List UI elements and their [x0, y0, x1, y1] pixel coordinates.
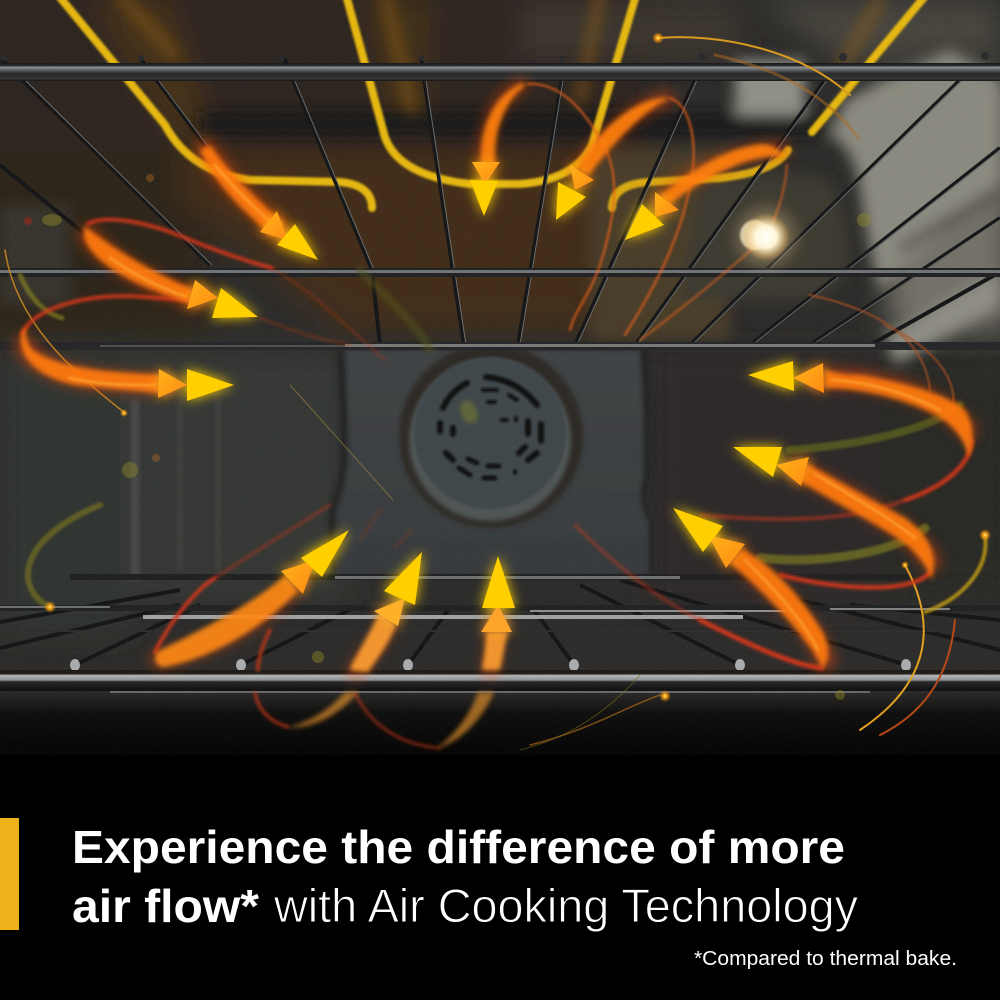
swirl: bottom flows: [155, 505, 508, 748]
wall pressed channels: [135, 350, 652, 580]
swirl: right flows: [575, 370, 973, 668]
upper oven rack: [0, 52, 1000, 350]
yellow accent bar: [0, 818, 19, 930]
headline: [72, 821, 858, 932]
arrows: right: [673, 361, 824, 568]
front lower bar: [0, 670, 1000, 691]
convection fan cover: [399, 344, 583, 528]
arrows: upper left: [158, 211, 318, 401]
headline: with Air Cooking Technology: [273, 879, 858, 932]
footnote: *Compared to thermal bake.: [694, 948, 957, 970]
spark points: [44, 32, 991, 702]
swirl: upper centre flows: [481, 83, 787, 340]
caption band: [0, 755, 1000, 1000]
bokeh specks: [24, 174, 871, 700]
back wall panel: [335, 350, 655, 575]
front rack bar: [0, 63, 1000, 81]
oven interior photo background: [0, 0, 1000, 760]
fade to black at base of photo: [0, 690, 1000, 756]
heating element: [58, 0, 926, 208]
light flare: [736, 207, 796, 267]
headline: air flow*: [72, 880, 259, 932]
arrows: upper centre: [470, 162, 679, 240]
swirl: upper left flows: [21, 145, 385, 393]
headline: Experience the difference of more: [72, 821, 845, 873]
lower oven rack: [0, 574, 1000, 693]
sparks and thin light trails: [5, 37, 986, 750]
film grain: [0, 0, 1000, 755]
arrows: bottom: [281, 530, 515, 632]
